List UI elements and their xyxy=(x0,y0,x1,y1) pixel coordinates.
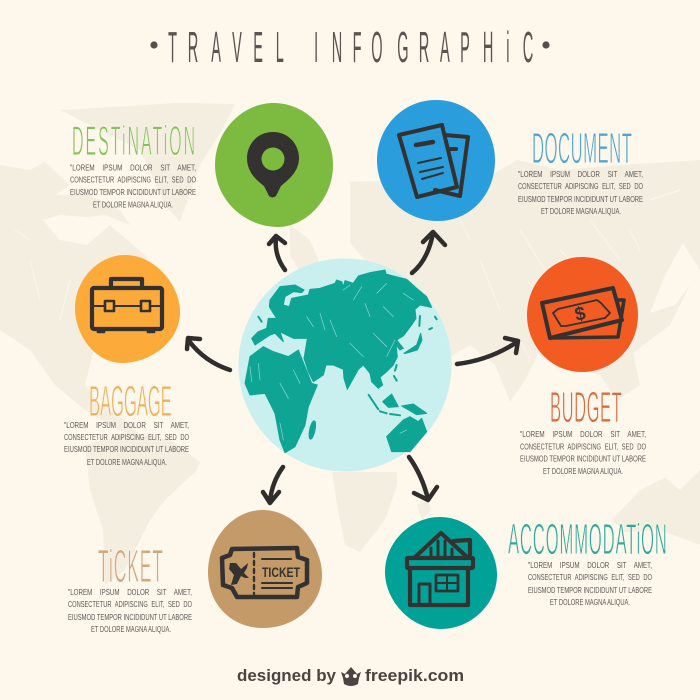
text: ticket body: ET DOLORE MAGNA ALIQUA. xyxy=(91,624,171,634)
icon: ticket xyxy=(222,548,307,597)
text: accommodation body: ET DOLORE MAGNA ALIQUA. xyxy=(550,597,630,607)
text: budget body xyxy=(520,429,646,476)
text: document body xyxy=(518,169,643,216)
text: document body: EIUSMOD TEMPOR INCIDIDUNT UT LABORE xyxy=(518,194,643,204)
heading: baggage: BAGGAGE xyxy=(89,378,172,427)
text: destination body: "LOREM IPSUM DOLOR SIT AMET, xyxy=(70,163,196,173)
text: budget body: EIUSMOD TEMPOR INCIDIDUNT UT LABORE xyxy=(520,454,646,464)
text: destination body: CONSECTETUR ADIPISCING ELIT, SED DO xyxy=(70,175,196,185)
panel: destination xyxy=(70,103,333,227)
title: INFOGRAPHiC xyxy=(314,22,533,71)
heading: destination: DESTiNATiON xyxy=(72,117,195,164)
icon circle: destination xyxy=(215,103,333,227)
panel: baggage xyxy=(64,255,189,467)
icon: house xyxy=(407,533,473,605)
text: budget body: "LOREM IPSUM DOLOR SIT AMET, xyxy=(520,429,646,439)
panel: budget xyxy=(520,257,646,476)
text: destination body: EIUSMOD TEMPOR INCIDIDUNT UT LABORE xyxy=(70,187,196,197)
title xyxy=(150,22,550,71)
panel: ticket xyxy=(68,510,322,634)
text: accommodation body: "LOREM IPSUM DOLOR SIT AMET, xyxy=(528,560,652,570)
arrow: to ticket xyxy=(263,467,283,503)
heading: budget: BUDGET xyxy=(550,384,622,433)
continents xyxy=(245,270,432,453)
islands xyxy=(258,316,437,415)
footer credit: designed by xyxy=(237,667,337,685)
text: ticket body: EIUSMOD TEMPOR INCIDIDUNT UT LABORE xyxy=(68,612,192,622)
panel: accommodation xyxy=(385,516,667,629)
text: baggage body xyxy=(64,420,189,467)
arrow: to accommodation xyxy=(409,457,437,500)
scribble highlights xyxy=(250,283,413,440)
icon circle: ticket xyxy=(208,510,322,628)
icon: ticket: TICKET xyxy=(262,564,300,580)
text: baggage body: ET DOLORE MAGNA ALIQUA. xyxy=(87,457,167,467)
footer credit: freepik.com xyxy=(365,667,464,685)
text: accommodation body: EIUSMOD TEMPOR INCIDIDUNT UT LABORE xyxy=(528,585,652,595)
icon: banknotes xyxy=(542,288,624,338)
heading: ticket: TiCKET xyxy=(98,542,163,593)
text: budget body: ET DOLORE MAGNA ALIQUA. xyxy=(543,466,623,476)
arrow: to document xyxy=(412,232,445,273)
heading: document: DOCUMENT xyxy=(532,125,632,174)
arrow: to baggage xyxy=(187,338,230,370)
text: document body: ET DOLORE MAGNA ALIQUA. xyxy=(541,206,621,216)
icon circle: document xyxy=(377,100,495,221)
panel: globe xyxy=(238,258,452,472)
background world map xyxy=(0,103,700,585)
icon: briefcase xyxy=(92,279,162,332)
text: budget body: CONSECTETUR ADIPISCING ELIT, SED DO xyxy=(520,442,646,452)
arrow: to budget xyxy=(457,338,518,364)
text: baggage body: CONSECTETUR ADIPISCING ELIT, SED DO xyxy=(64,432,189,442)
text: ticket body xyxy=(68,587,192,634)
icon circle: accommodation xyxy=(385,517,497,629)
icon: map pin xyxy=(247,132,299,198)
text: baggage body: "LOREM IPSUM DOLOR SIT AMET, xyxy=(64,420,189,430)
text: baggage body: EIUSMOD TEMPOR INCIDIDUNT UT LABORE xyxy=(64,444,189,454)
text: document body: CONSECTETUR ADIPISCING ELIT, SED DO xyxy=(518,181,643,191)
icon: freepik logo xyxy=(341,667,361,686)
heading: accommodation: ACCOMMODATiON xyxy=(508,516,667,565)
icon: banknotes: $ xyxy=(573,303,588,326)
footer credit xyxy=(237,667,464,686)
text: destination body xyxy=(70,163,196,209)
text: destination body: ET DOLORE MAGNA ALIQUA. xyxy=(93,199,173,209)
panel: document xyxy=(377,100,643,221)
text: ticket body: "LOREM IPSUM DOLOR SIT AMET, xyxy=(68,587,192,597)
icon circle: baggage xyxy=(75,255,180,363)
text: ticket body: CONSECTETUR ADIPISCING ELIT, SED DO xyxy=(68,599,192,609)
text: document body: "LOREM IPSUM DOLOR SIT AMET, xyxy=(518,169,643,179)
arrow: to destination xyxy=(269,236,285,270)
text: accommodation body xyxy=(528,560,652,607)
icon: documents xyxy=(399,125,468,197)
title: TRAVEL xyxy=(168,22,284,71)
icon circle: budget xyxy=(527,257,638,372)
